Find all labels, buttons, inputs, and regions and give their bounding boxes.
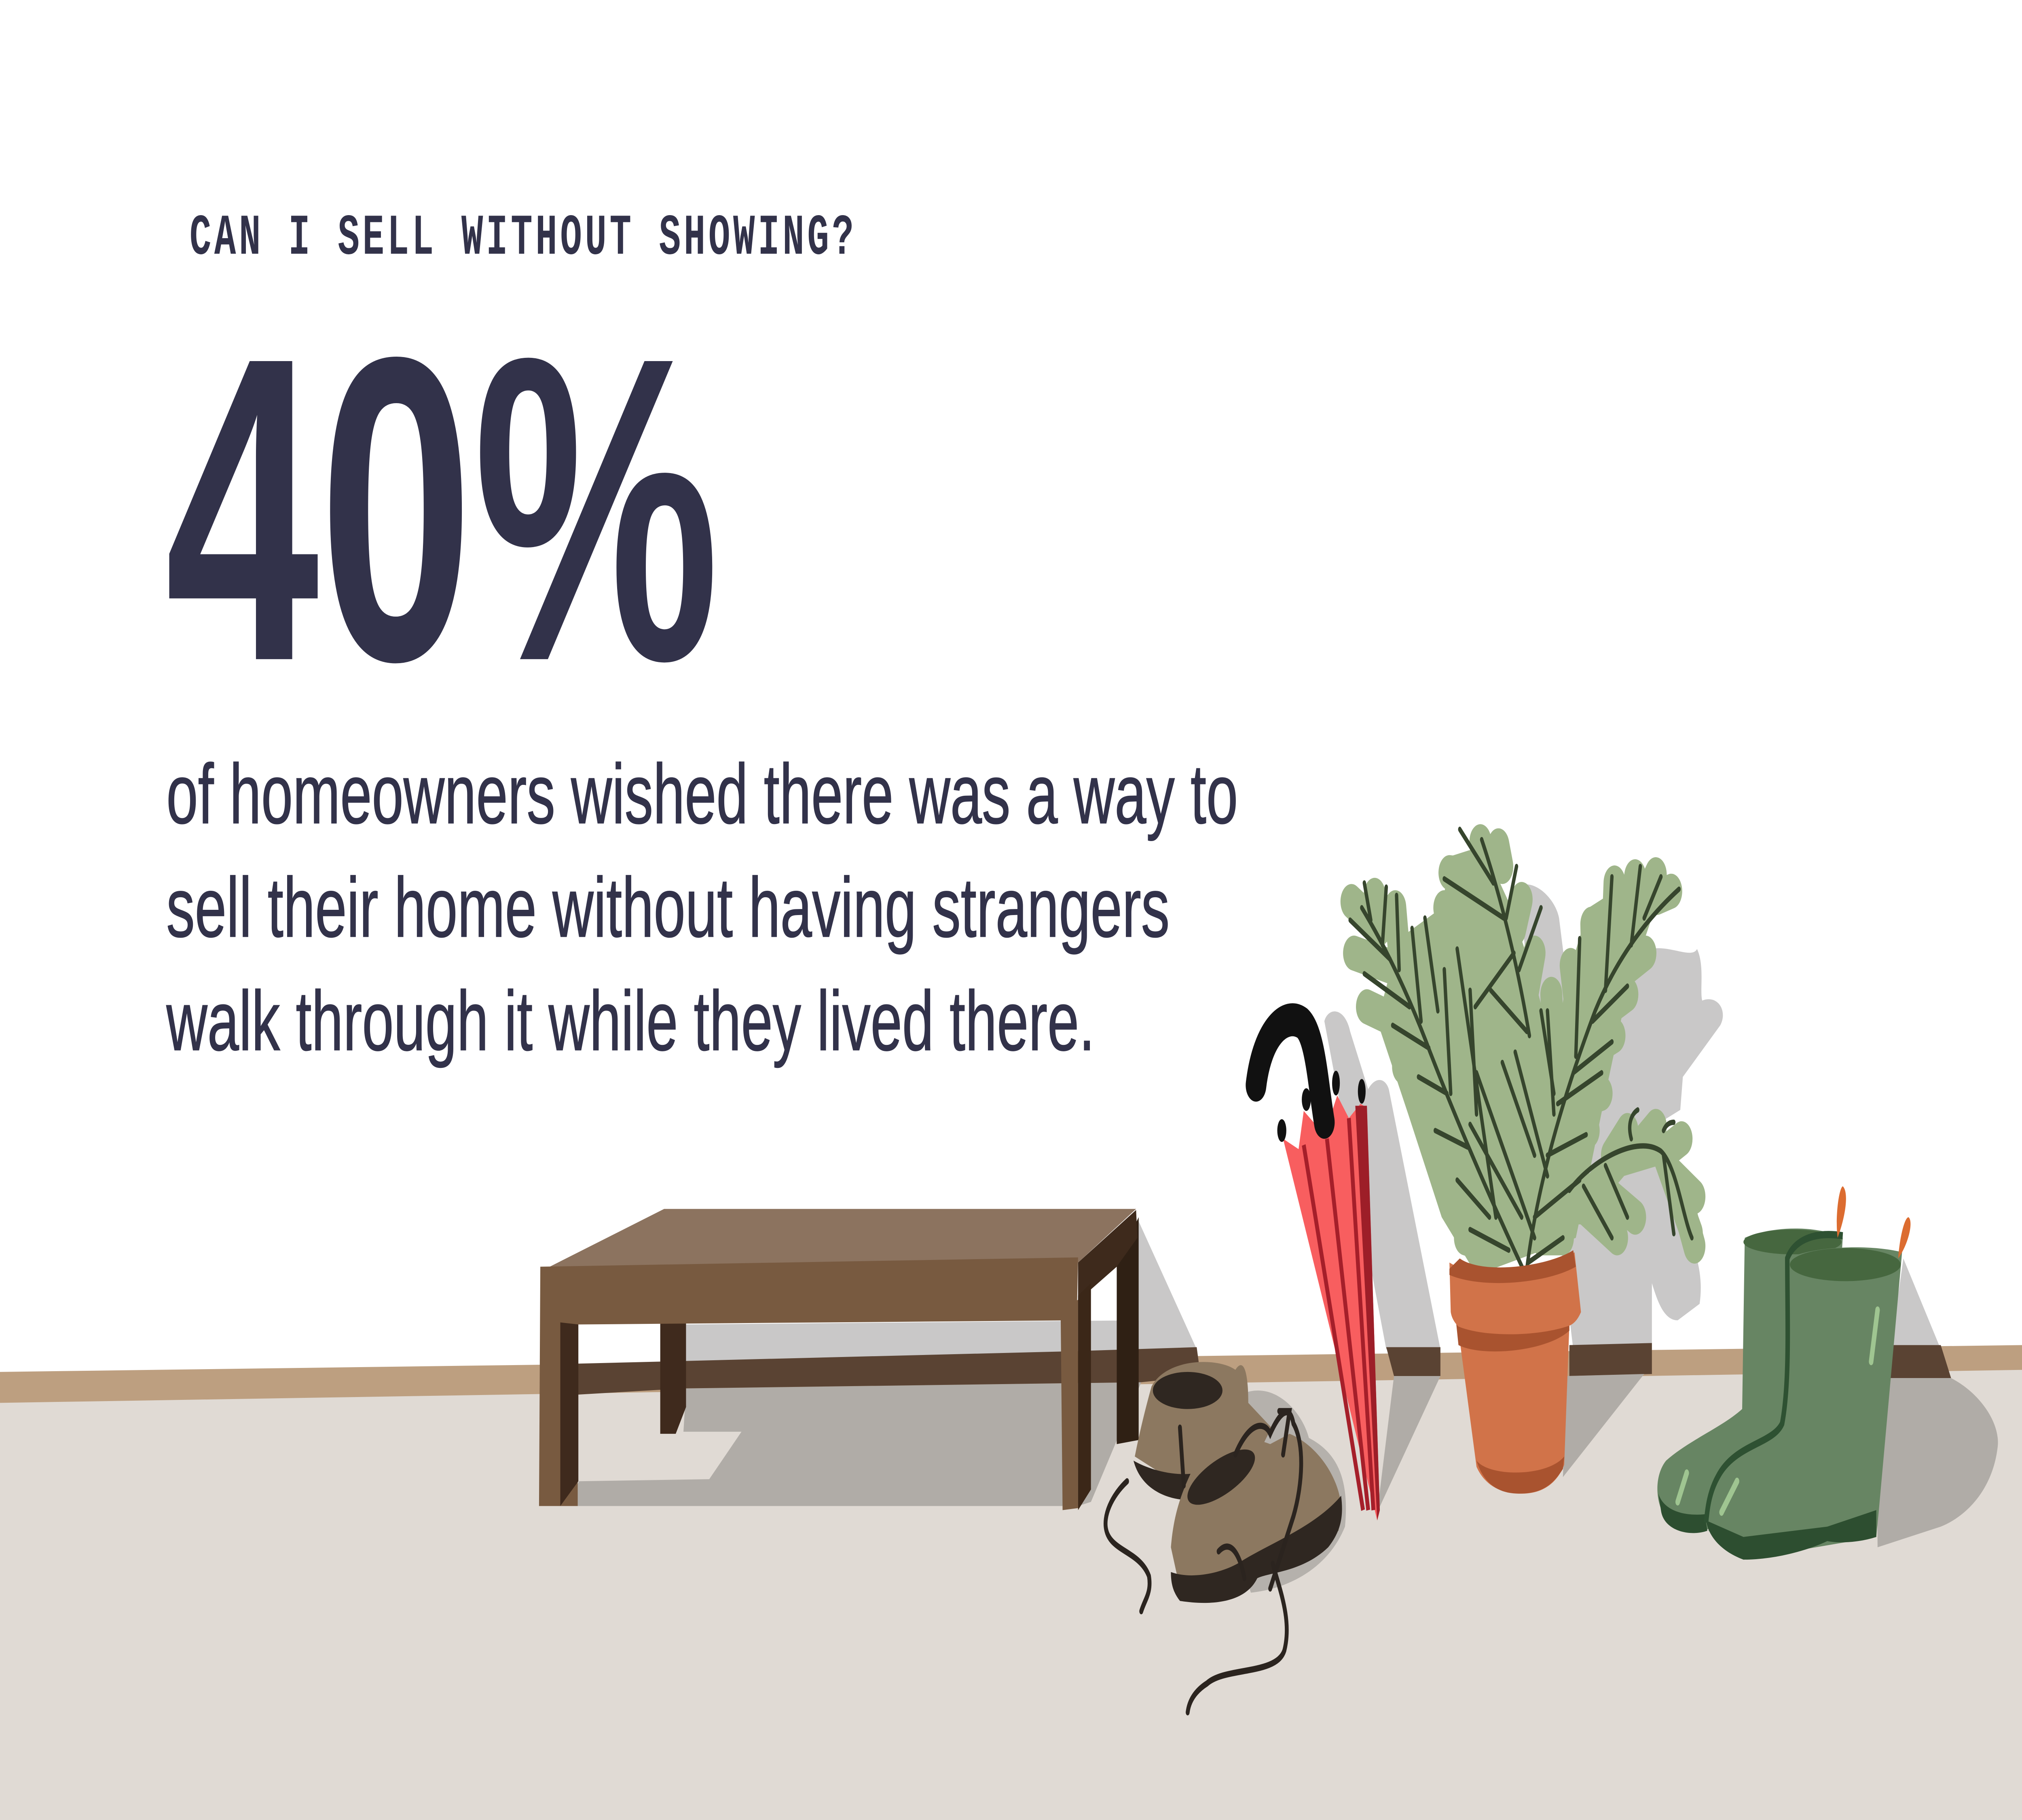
umbrella handle and tips bbox=[1256, 1020, 1324, 1122]
back boot bbox=[1135, 1362, 1271, 1490]
title: CAN I SELL WITHOUT SHOWING? bbox=[190, 206, 854, 271]
front boot bbox=[1171, 1434, 1341, 1593]
body text: of homeowners wished there was a way to bbox=[166, 746, 1238, 841]
central foliage mass bbox=[1377, 846, 1664, 1275]
body text: sell their home without having strangers bbox=[166, 860, 1170, 955]
back boot bbox=[1657, 1228, 1843, 1531]
dark stems and leaf veins bbox=[1350, 829, 1692, 1269]
boot highlights bbox=[1678, 1310, 1878, 1512]
foliage bbox=[1350, 829, 1694, 1275]
boot pull tabs bbox=[1837, 1186, 1910, 1258]
hiking boots bbox=[1106, 1362, 1346, 1712]
front boot bbox=[1707, 1247, 1902, 1560]
body text bbox=[166, 746, 1238, 1068]
umbrella canopy bbox=[1283, 1095, 1380, 1520]
big statistic 40%: 40% bbox=[165, 267, 719, 751]
bench bbox=[539, 1209, 1139, 1510]
body text: walk through it while they lived there. bbox=[166, 973, 1095, 1068]
terracotta pot bbox=[1459, 1324, 1569, 1494]
boots shadow bbox=[1225, 1391, 1346, 1593]
potted plant bbox=[1350, 829, 1694, 1494]
green leaves bbox=[1352, 842, 1694, 1248]
floor and baseboard bbox=[0, 1345, 2022, 1820]
umbrella bbox=[1256, 1020, 1380, 1520]
rain boots bbox=[1657, 1186, 1910, 1560]
baseboard and floor shadows bbox=[567, 1343, 1998, 1547]
wall shadows bbox=[686, 884, 1941, 1366]
laces bbox=[1106, 1411, 1301, 1712]
